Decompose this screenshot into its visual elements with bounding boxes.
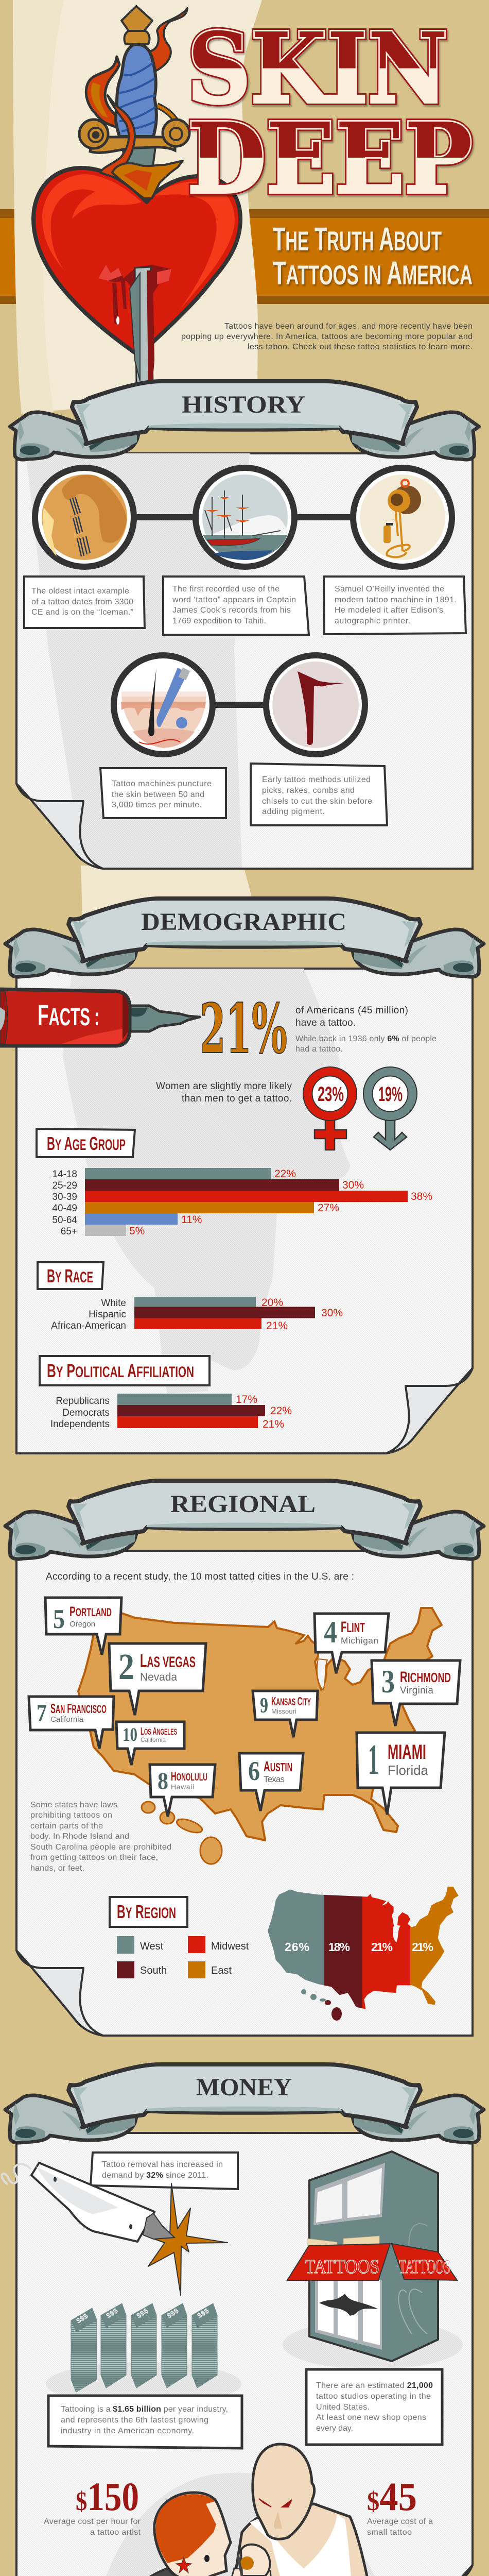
legend: regions: East — [211, 1965, 232, 1976]
money stack tops: $$$ — [165, 2306, 180, 2320]
stat: $150: Average cost per hour for — [44, 2517, 141, 2526]
text box: studios: At least one new shop opens — [316, 2413, 426, 2422]
callout: honolulu: HONOLULU — [171, 1770, 207, 1784]
text: state laws: body. In Rhode Island and — [30, 1832, 129, 1841]
bar chart: race — [51, 1297, 343, 1332]
gender text — [156, 1081, 292, 1104]
icon: tattoo machine — [353, 468, 452, 567]
callout: las vegas: LAS VEGAS — [140, 1650, 196, 1671]
bar chart: political: Republicans — [56, 1396, 110, 1406]
icon: laser removal pen — [2, 2163, 174, 2242]
heading: by race: BY RACE — [47, 1265, 93, 1286]
text box: samuel o'reilly: He modeled it after Edison's — [335, 606, 443, 615]
shop awning text: TATTOOS — [305, 2256, 379, 2278]
callout: flint: Michigan — [341, 1636, 378, 1646]
callout: honolulu — [150, 1765, 215, 1817]
text box: early methods: chisels to cut the skin before — [262, 797, 372, 806]
stat text: While back in 1936 only 6% of people — [295, 1035, 436, 1043]
text box: iceman: CE and is on the “Iceman.” — [31, 608, 133, 617]
text box: studios: tattoo studios operating in the — [316, 2392, 431, 2401]
stat text — [295, 1005, 436, 1054]
title word: skin: SKIN — [187, 11, 448, 125]
text box: industry: industry in the American economy. — [61, 2427, 194, 2435]
stat text: had a tattoo. — [295, 1045, 343, 1054]
panel: history — [16, 453, 473, 869]
heading: by region: BY REGION — [117, 1901, 176, 1922]
banner: demographic — [5, 899, 484, 977]
text box: punctures: Tattoo machines puncture — [112, 779, 212, 788]
map: regional percentages — [268, 1887, 459, 2021]
intro text: Tattoos have been around for ages, and more recently have been — [224, 322, 473, 331]
bar chart: race: African-American — [51, 1320, 126, 1331]
stat: $150: a tattoo artist — [90, 2528, 141, 2537]
text box: iceman: The oldest intact example — [31, 587, 129, 596]
text box: captain cook: The first recorded use of the — [172, 585, 280, 594]
text box: studios: United States. — [316, 2403, 370, 2412]
callout: miami: Florida — [388, 1762, 429, 1778]
callout: portland: 5 — [53, 1604, 65, 1634]
dagger blade top — [122, 147, 155, 170]
icon: tattoo shop — [287, 2151, 457, 2361]
intro text: less taboo. Check out these tattoo statistics to learn more. — [248, 343, 473, 351]
callout: honolulu: 8 — [158, 1768, 168, 1794]
bar chart: age: 30% — [342, 1179, 364, 1191]
bar chart: political — [50, 1394, 292, 1430]
text box: samuel o'reilly: autographic printer. — [335, 617, 410, 625]
legend: regions: West — [140, 1941, 164, 1952]
money stack tops — [71, 2303, 217, 2332]
bar chart: political: 21% — [263, 1418, 284, 1430]
text: state laws — [30, 1801, 171, 1873]
facts pen: FACTS : — [38, 999, 99, 1032]
map: regional percentages: 21% — [371, 1940, 393, 1954]
callout: portland: PORTLAND — [69, 1604, 112, 1619]
callout: kansas city: KANSAS CITY — [271, 1694, 311, 1708]
legend: regions: South — [140, 1965, 167, 1976]
banner: demographic: DEMOGRAPHIC — [141, 908, 346, 936]
panel: regional — [16, 1551, 473, 2036]
callout: flint — [315, 1614, 389, 1673]
callout: san francisco: SAN FRANCISCO — [50, 1701, 107, 1716]
text: state laws: certain parts of the — [30, 1822, 103, 1831]
bar chart: political: 17% — [236, 1394, 257, 1405]
icon: iceman skin — [35, 468, 134, 567]
bar chart: race: Hispanic — [89, 1309, 126, 1320]
callout: san francisco — [29, 1697, 114, 1749]
text box: captain cook — [163, 577, 309, 635]
icon: laser spark — [148, 2183, 228, 2295]
heading: by political affiliation: BY POLITICAL AFFILIATION — [47, 1360, 194, 1381]
text box: industry: Tattooing is a $1.65 billion per year industry, — [61, 2405, 228, 2414]
icon: ship — [196, 468, 294, 567]
subtitle: THE TRUTH ABOUT — [273, 221, 442, 258]
facts pen — [0, 989, 200, 1046]
callout: kansas city — [253, 1691, 318, 1737]
banner: history — [10, 381, 479, 460]
text box: early methods: adding pigment. — [262, 807, 325, 816]
text box: punctures: 3,000 times per minute. — [112, 801, 202, 809]
stat: $45: small tattoo — [367, 2528, 412, 2537]
bar chart: age: 25-29 — [52, 1180, 77, 1191]
money stack tops: $$$ — [75, 2311, 90, 2325]
bar chart: age: 11% — [181, 1214, 202, 1226]
callout: austin: Texas — [264, 1774, 285, 1784]
text box: captain cook: James Cook's records from his — [172, 606, 291, 615]
bar chart: political: Independents — [50, 1419, 110, 1430]
heading: by race — [38, 1262, 103, 1289]
text box: industry — [48, 2396, 242, 2448]
callout: los angeles: 10 — [123, 1724, 137, 1745]
bar chart: age: 38% — [411, 1191, 432, 1202]
bar chart: age: 5% — [129, 1225, 145, 1237]
title word: skin: SKIN — [187, 11, 448, 125]
text box: tattoo removal: Tattoo removal has increased in — [102, 2160, 223, 2169]
map: regional percentages: 21% — [412, 1940, 433, 1954]
icon: male symbol: 19% — [378, 1083, 403, 1106]
text: state laws: Some states have laws — [30, 1801, 117, 1809]
text box: punctures: the skin between 50 and — [112, 790, 204, 799]
heading: by region — [110, 1897, 187, 1927]
callout: las vegas: 2 — [118, 1646, 134, 1687]
callout: austin: 6 — [248, 1756, 260, 1786]
stat: $150: $150 — [76, 2474, 139, 2519]
callout: flint: 4 — [324, 1615, 337, 1649]
callout: miami — [357, 1733, 445, 1815]
callout: los angeles: LOS ANGELES — [141, 1726, 177, 1737]
banner: money: MONEY — [196, 2074, 292, 2101]
title word: skin: SKIN — [187, 11, 448, 125]
panel: money — [2, 2133, 473, 2576]
gender text: Women are slightly more likely — [156, 1081, 292, 1092]
bar chart: race: White — [101, 1298, 126, 1309]
text box: early methods: Early tattoo methods utilized — [262, 775, 371, 784]
text box: punctures — [100, 768, 226, 818]
stat text: of Americans (45 million) — [295, 1005, 408, 1016]
text: state laws: hands, or feet. — [30, 1864, 84, 1873]
bar chart: race: 21% — [266, 1320, 288, 1332]
icon: female symbol — [303, 1067, 357, 1150]
dagger handle — [116, 44, 156, 137]
stat: $45: Average cost of a — [367, 2517, 433, 2526]
title word: deep: DEEP — [187, 101, 473, 215]
title word: deep: DEEP — [187, 101, 473, 215]
icon: skin cross-section — [114, 655, 213, 754]
legend: regions: Midwest — [211, 1941, 249, 1952]
icon: early tattoo tool — [266, 655, 365, 754]
stat: $45 — [367, 2474, 433, 2537]
callout: honolulu: Hawaii — [171, 1783, 194, 1791]
money stack tops: $$$ — [104, 2306, 119, 2320]
text box: samuel o'reilly: Samuel O'Reilly invented the — [335, 585, 444, 594]
bar chart: age: 40-49 — [52, 1203, 77, 1214]
stat: 21%: 21% — [200, 989, 287, 1069]
text box: iceman: of a tattoo dates from 3300 — [31, 598, 133, 606]
intro text: popping up everywhere. In America, tattoos are becoming more popular and — [181, 332, 473, 341]
bar chart: race: 30% — [321, 1307, 343, 1319]
banner: history: HISTORY — [182, 391, 305, 418]
callout: richmond: 3 — [381, 1663, 395, 1700]
callout: san francisco: 7 — [37, 1700, 47, 1726]
banner: money — [5, 2064, 484, 2143]
callout: miami: 1 — [368, 1736, 379, 1784]
callout: las vegas — [109, 1643, 206, 1715]
callout: los angeles — [116, 1722, 184, 1765]
bar chart: age: 27% — [318, 1202, 339, 1214]
subtitle — [273, 221, 473, 292]
text box: early methods: picks, rakes, combs and — [262, 786, 355, 795]
callout: portland — [45, 1598, 121, 1655]
callout: los angeles: California — [141, 1736, 166, 1743]
text box: tattoo removal — [91, 2153, 238, 2189]
stat: $45: $45 — [367, 2474, 417, 2519]
gender text: than men to get a tattoo. — [182, 1093, 292, 1104]
stat: $150 — [44, 2474, 141, 2537]
legend: regions — [117, 1936, 249, 1978]
bar chart: age — [52, 1168, 432, 1237]
text box: tattoo removal: demand by 32% since 2011. — [102, 2171, 208, 2180]
regional intro text: According to a recent study, the 10 most tatted cities in the U.S. are : — [46, 1571, 354, 1582]
heading: by political affiliation — [40, 1356, 209, 1385]
callout: kansas city: Missouri — [271, 1707, 296, 1715]
panel: demographic — [0, 969, 473, 1453]
blade through heart — [98, 265, 171, 384]
skin swath background — [13, 0, 262, 917]
heart — [33, 168, 240, 355]
illustration: tattoo artist and client — [110, 2444, 378, 2576]
bar chart: age: 22% — [274, 1168, 296, 1180]
text box: captain cook: 1769 expedition to Tahiti. — [172, 617, 266, 625]
text: state laws: prohibiting tattoos on — [30, 1811, 112, 1820]
text box: captain cook: word ‘tattoo” appears in Captain — [172, 596, 296, 604]
text box: studios: There are an estimated 21,000 — [316, 2381, 433, 2390]
intro text — [181, 322, 473, 351]
bar chart: age: 50-64 — [52, 1215, 77, 1226]
callout: austin — [239, 1753, 303, 1811]
bar chart: political: 22% — [270, 1405, 292, 1417]
heading: by age group: BY AGE GROUP — [47, 1133, 126, 1154]
callout: austin: AUSTIN — [264, 1758, 292, 1774]
callout: portland: Oregon — [69, 1620, 95, 1629]
callout: richmond: RICHMOND — [400, 1669, 451, 1686]
icon: female symbol: 23% — [318, 1083, 344, 1106]
text box: studios — [306, 2369, 442, 2445]
icon: money stacks — [71, 2303, 217, 2392]
stat text: have a tattoo. — [295, 1018, 356, 1028]
text box: iceman — [24, 577, 145, 628]
callout: miami: MIAMI — [388, 1741, 426, 1764]
text box: samuel o'reilly — [324, 577, 466, 634]
illustration: dagger through heart — [33, 6, 240, 384]
banner: regional: REGIONAL — [170, 1490, 316, 1518]
title word: deep: DEEP — [187, 101, 473, 215]
text box: industry: and represents the 6th fastest growing — [61, 2416, 208, 2425]
bar chart: race: 20% — [261, 1297, 283, 1309]
bar chart: age: 14-18 — [52, 1169, 77, 1180]
map: united states — [78, 1608, 442, 1864]
callout: san francisco: California — [50, 1715, 84, 1724]
timeline connectors — [134, 514, 355, 708]
text box: samuel o'reilly: modern tattoo machine in 1891. — [335, 596, 457, 604]
text: state laws: from getting tattoos on their face, — [30, 1853, 158, 1862]
bar chart: age: 65+ — [61, 1226, 77, 1237]
dagger guard — [79, 120, 189, 152]
dagger pommel — [121, 6, 152, 44]
icon: male symbol — [363, 1067, 417, 1150]
heading: by age group — [37, 1129, 135, 1157]
map: regional percentages: 26% — [285, 1940, 309, 1954]
text box: studios: every day. — [316, 2424, 353, 2433]
flames behind dagger — [86, 8, 187, 129]
text: state laws: South Carolina people are prohibited — [30, 1843, 171, 1852]
callout: richmond: Virginia — [400, 1685, 433, 1696]
callout: richmond — [372, 1660, 460, 1726]
money stack tops: $$$ — [135, 2306, 150, 2320]
money stack tops: $$$ — [196, 2306, 211, 2320]
callout: flint: FLINT — [341, 1619, 365, 1636]
title — [187, 11, 473, 215]
banner: regional — [5, 1481, 484, 1559]
front flame — [100, 95, 183, 198]
text box: early methods — [251, 764, 387, 825]
callout: las vegas: Nevada — [140, 1671, 177, 1683]
bar chart: age: 30-39 — [52, 1192, 77, 1202]
callout: kansas city: 9 — [260, 1694, 268, 1718]
icon: tattoo shop: TATTOOS — [399, 2256, 450, 2278]
bar chart: political: Democrats — [62, 1408, 110, 1418]
header bands — [0, 209, 489, 304]
map: regional percentages: 18% — [328, 1940, 350, 1954]
